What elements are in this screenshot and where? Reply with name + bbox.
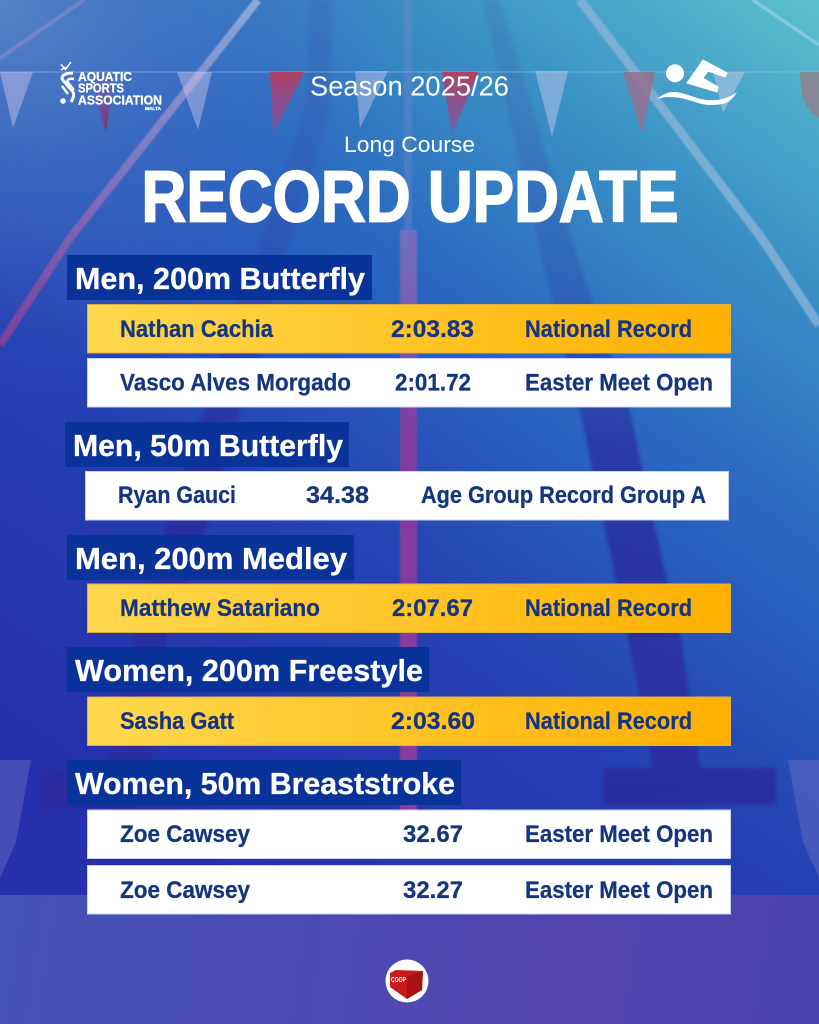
logo mark [60, 62, 74, 104]
row: Nathan Cachia: National Record [525, 316, 692, 343]
row: Nathan Cachia: 2:03.83 [391, 316, 474, 343]
row: Zoe Cawsey 32.27: 32.27 [403, 877, 463, 904]
starting blocks [0, 760, 819, 878]
panel: men 200m butterfly [67, 255, 730, 407]
row: Zoe Cawsey 32.67 [88, 810, 730, 858]
pennant line and flags [0, 71, 819, 137]
panel: women 50m breaststroke [67, 760, 730, 914]
row: Sasha Gatt: 2:03.60 [391, 708, 475, 735]
row: Vasco Alves Morgado [88, 358, 730, 407]
row: Zoe Cawsey 32.67: Easter Meet Open [525, 821, 713, 848]
row: Matthew Satariano [88, 584, 730, 632]
lane ropes [0, 0, 819, 812]
logo wordmark [78, 69, 162, 111]
icon: swimmer [657, 60, 737, 105]
row: Zoe Cawsey 32.27: Zoe Cawsey [120, 877, 250, 904]
logo wordmark: SPORTS [78, 80, 124, 96]
row: Ryan Gauci: 34.38 [306, 482, 369, 509]
row: Ryan Gauci: Ryan Gauci [118, 482, 236, 509]
row: Zoe Cawsey 32.27: Easter Meet Open [525, 877, 713, 904]
row: Matthew Satariano: Matthew Satariano [120, 595, 320, 622]
panel: women 200m freestyle [67, 647, 730, 746]
heading: Men, 200m Butterfly [75, 262, 365, 296]
association logo [60, 62, 162, 111]
row: Ryan Gauci [86, 472, 728, 520]
row: Ryan Gauci: Age Group Record Group A [421, 482, 706, 509]
heading: Women, 200m Freestyle [75, 654, 423, 688]
course label: Long Course [344, 132, 475, 157]
row: Nathan Cachia [88, 304, 730, 353]
row: Zoe Cawsey 32.27 [88, 866, 730, 914]
row: Sasha Gatt: National Record [525, 708, 692, 735]
heading: Men, 200m Medley [75, 542, 347, 576]
pool deck [0, 895, 819, 1024]
season label: Season 2025/26 [310, 70, 509, 102]
row: Zoe Cawsey 32.67: Zoe Cawsey [120, 821, 250, 848]
sponsor badge [386, 960, 428, 1002]
heading: Men, 50m Butterfly [73, 429, 343, 463]
logo wordmark: AQUATIC [78, 69, 133, 84]
row: Vasco Alves Morgado: 2:01.72 [395, 370, 471, 396]
row: Vasco Alves Morgado: Easter Meet Open [525, 370, 713, 396]
lane floor shadows [40, 0, 776, 808]
sponsor badge: COOP [391, 977, 406, 984]
logo wordmark: MALTA [145, 106, 162, 111]
heading: Women, 50m Breaststroke [75, 767, 455, 801]
row: Nathan Cachia: Nathan Cachia [120, 316, 273, 343]
title: RECORD UPDATE [142, 158, 678, 238]
logo wordmark: ASSOCIATION [78, 92, 162, 108]
panel: men 50m butterfly [65, 422, 728, 520]
row: Zoe Cawsey 32.67: 32.67 [403, 821, 463, 848]
row: Sasha Gatt: Sasha Gatt [120, 708, 234, 735]
row: Matthew Satariano: 2:07.67 [392, 595, 473, 622]
row: Sasha Gatt [88, 697, 730, 746]
panel: men 200m medley [67, 535, 730, 632]
row: Matthew Satariano: National Record [525, 595, 692, 622]
row: Vasco Alves Morgado: Vasco Alves Morgado [120, 370, 351, 396]
